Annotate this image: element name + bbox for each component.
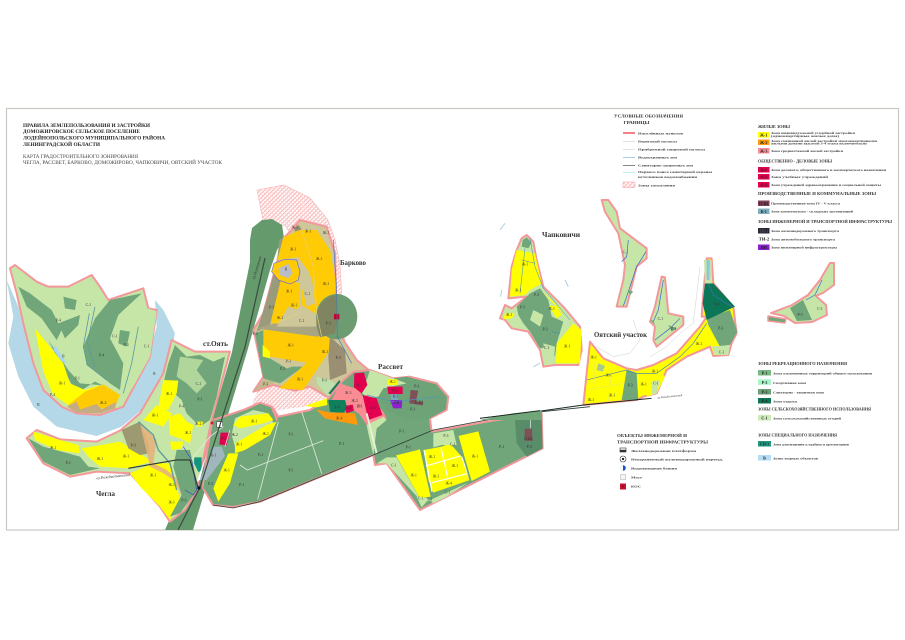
territory: Barkovo: Ж-1 (297, 378, 303, 382)
territory: Rassvet and southern fields: Р-1 (239, 483, 244, 487)
territory: Oyat section: оз.Рождественский (657, 392, 683, 400)
territory: Chapkovichi: Ж-1 (548, 307, 555, 311)
territory: Barkovo: Ж-1 (286, 290, 293, 294)
territory: Barkovo: Ж-1 (277, 316, 283, 320)
territory: Oyat section: Р-3 (718, 326, 723, 330)
territory: Barkovo: Ж-1 (316, 257, 323, 261)
icon: railway crossing (620, 456, 626, 462)
territory: Rassvet and southern fields: Р-3 (410, 408, 415, 412)
legend: special purpose zones: Зоны водных объектов (773, 456, 818, 460)
legend: public and business zones: О-1 (760, 168, 767, 172)
legend: boundaries: Водоохранных зон (638, 156, 677, 160)
railway corridor: зд.Подпорожье (252, 255, 263, 280)
legend: engineering and transport objects: Железнодорожная платформа (631, 449, 696, 453)
territory: Barkovo: С-1 (299, 319, 305, 323)
title block (23, 123, 223, 166)
legend: recreational zones: Р-2 (762, 380, 767, 385)
legend: boundaries: Зоны затопления (638, 184, 675, 188)
legend: boundaries: УСЛОВНЫЕ ОБОЗНАЧЕНИЯ (614, 114, 683, 118)
legend: boundaries (614, 114, 712, 188)
legend: engineering and transport objects: Водонапорная башня (631, 466, 677, 470)
territory: Chapkovichi: Р-3 (542, 328, 548, 332)
territory: eastern island (768, 263, 834, 323)
legend: public and business zones (758, 160, 886, 188)
icon: water tower (621, 465, 626, 471)
territory: lower Chegla (27, 340, 230, 522)
place names: Оятский участок (594, 331, 648, 339)
territory: upper Chegla peninsula: Ж-1 (59, 381, 65, 385)
legend: infrastructure zones: ТИ-2 (759, 236, 770, 242)
territory: Rassvet and southern fields: О-2 (345, 406, 351, 410)
legend: public and business zones: ОБЩЕСТВЕННО - ДЕЛОВЫЕ ЗОНЫ (758, 160, 832, 164)
territory: Oyat section: Ж-1 (652, 370, 658, 374)
territory: Barkovo: Р-3 (280, 367, 285, 371)
legend: production and communal zones: ПРОИЗВОДСТВЕННЫЕ И КОММУНАЛЬНЫЕ ЗОНЫ (758, 192, 876, 196)
railway corridor (165, 219, 284, 530)
territory: Oyat section: Ж-1 (605, 374, 612, 378)
territory: lower Chegla: Р-3 (181, 499, 187, 503)
territory: lower Chegla: Ж-1 (166, 392, 173, 396)
legend: recreational zones: Р-1 (762, 370, 767, 376)
territory: Rassvet and southern fields: Р-1 (288, 433, 294, 437)
legend: recreational zones: Зона озелененных территорий общего пользования (773, 372, 872, 376)
territory: Oyat section: Ж-1 (588, 398, 594, 402)
legend: engineering and transport objects (617, 433, 723, 490)
territory: eastern island: Р-3 (797, 313, 803, 317)
legend: residential zones (758, 125, 878, 154)
territory: Rassvet and southern fields: Р-3 (527, 445, 532, 449)
territory: Chapkovichi: Ж-1 (564, 344, 571, 348)
territory: Rassvet and southern fields: ИИ (394, 401, 400, 405)
station block: Chegla crossing: О-2 (220, 436, 226, 440)
legend: engineering and transport objects: ТРАНСПОРТНОЙ ИНФРАСТРУКТУРЫ (617, 440, 708, 444)
territory: Oyat section: Р-3 (627, 384, 633, 388)
territory: central ribbon parcels: С-1 (658, 317, 663, 321)
legend: engineering and transport objects: КОС (631, 484, 642, 488)
territory: Rassvet and southern fields: Р-1 (499, 445, 504, 449)
territory: Barkovo: Р-3 (286, 360, 291, 364)
legend: production and communal zones: П-К2 (759, 201, 768, 206)
territory: Barkovo: В (285, 268, 288, 272)
title block: ПРАВИЛА ЗЕМЛЕПОЛЬЗОВАНИЯ И ЗАСТРОЙКИ (23, 123, 150, 129)
legend: production and communal zones: Зона коммунально - складских организаций (771, 210, 853, 214)
territory: Chapkovichi: Ж-1 (522, 263, 528, 267)
territory: Oyat section: С-1 (653, 382, 659, 386)
territory: Rassvet and southern fields: П-К2 (524, 437, 533, 441)
territory: lower Chegla: Ж-1 (50, 446, 57, 450)
territory: Rassvet and southern fields: Р-1 (258, 453, 263, 457)
map frame (6, 108, 898, 530)
territory: Rassvet and southern fields: П-К2 (415, 400, 423, 404)
place names: Барково (340, 259, 366, 267)
legend: boundaries: Населённых пунктов (638, 132, 683, 136)
territory: Rassvet and southern fields: Ж-1 (429, 455, 435, 459)
legend: boundaries: Береговой полосы (638, 140, 677, 144)
territory: Rassvet and southern fields: Р-1 (339, 442, 344, 446)
territory: Oyat section: Ж-1 (590, 355, 597, 359)
territory: Rassvet and southern fields: О-3 (369, 406, 375, 410)
legend: boundaries: источников водоснабжения (638, 175, 697, 179)
legend: infrastructure zones: Зона железнодорожного транспорта (771, 229, 839, 233)
territory: Barkovo: Р-3 (269, 305, 274, 309)
legend: agricultural zones (758, 406, 871, 420)
territory: Rassvet and southern fields: К-1 (393, 394, 399, 398)
icon: railway platform (620, 448, 626, 452)
territory: upper Chegla peninsula: В (153, 372, 156, 376)
railway line (178, 258, 265, 530)
legend: recreational zones: Спортивная зона (773, 381, 806, 385)
legend: engineering and transport objects: Мост (631, 476, 642, 480)
territory: Barkovo: Ж-1 (290, 248, 297, 252)
territory: Rassvet and southern fields: ИИ (357, 405, 362, 409)
place names (96, 231, 648, 498)
territory: Barkovo: Ж-3 (291, 225, 298, 229)
territory: Oyat section: Ж-1 (640, 382, 647, 386)
legend: recreational zones: Санаторно - защитная зона (773, 390, 824, 394)
title block: ЧЕГЛА, РАССВЕТ, БАРКОВО, ДОМОЖИРОВО, ЧАПКОВИЧИ, ОЯТСКИЙ УЧАСТОК (23, 160, 223, 166)
station block: Chegla crossing: Ж-1 (251, 419, 258, 423)
icon: treatment facility (620, 484, 626, 490)
territory: lower Chegla: С-1 (196, 382, 201, 386)
territory: upper Chegla peninsula: С-1 (144, 344, 150, 348)
territory: Rassvet and southern fields: Ж-1 (410, 474, 417, 478)
legend: residential zones: Ж-2 (760, 140, 767, 145)
place names: Чапковичи (542, 231, 580, 239)
legend: residential zones: ЖИЛЫЕ ЗОНЫ (758, 125, 790, 129)
legend: special purpose zones: Зона размещения кладбищ и крематориев (773, 442, 849, 446)
legend: engineering and transport objects: Неохраняемый железнодорожный переезд. (631, 458, 723, 462)
legend: infrastructure zones: Зона автомобильного транспорта (771, 238, 835, 242)
territory: upper Chegla peninsula: Р-4 (50, 393, 55, 397)
legend: public and business zones: Зона учреждений здравоохранения и социальной защиты (771, 183, 881, 187)
territory: upper Chegla peninsula: С-1 (86, 303, 91, 307)
legend: public and business zones: О-3 (760, 182, 767, 188)
legend: residential zones: жилыми домами высотой 3-4 этажа включительно (771, 143, 868, 146)
legend: recreational zones: Зона отдыха (773, 400, 797, 404)
territory: Barkovo: С-1 (305, 292, 310, 296)
territory: Barkovo: Ж-1 (291, 304, 297, 308)
territory: Rassvet and southern fields: Р-1 (406, 445, 411, 449)
territory: lower Chegla: оз.Рождественский (96, 472, 130, 480)
territory: eastern island: С-1 (817, 307, 823, 311)
territory: Rassvet and southern fields: Ж-4 (445, 481, 452, 485)
legend: special purpose zones: ЗОНЫ СПЕЦИАЛЬНОГО НАЗНАЧЕНИЯ (758, 434, 837, 438)
territory: lower Chegla: Ж-1 (185, 431, 192, 435)
territory: Rassvet and southern fields: С-1 (450, 442, 456, 446)
legend: agricultural zones: Зона сельскохозяйственных угодий (773, 416, 841, 420)
legend: recreational zones: Р-3 (762, 390, 767, 394)
legend: boundaries: Санитарно-защитных зон (638, 164, 693, 168)
territory: upper Chegla peninsula: В (62, 354, 65, 358)
territory: Oyat section: Ж-1 (696, 342, 702, 346)
legend: production and communal zones: Производственная зона IV - V класса (771, 202, 840, 206)
territory: Barkovo: Р-3 (263, 383, 268, 387)
legend: special purpose zones: В (763, 456, 766, 460)
territory: upper Chegla peninsula (10, 265, 157, 415)
legend: public and business zones: Зона делового, общественного и коммерческого назначения (771, 168, 886, 172)
territory: Rassvet and southern fields: Ж-4 (336, 416, 343, 420)
legend: public and business zones: Зона учебных учреждений (771, 175, 828, 179)
station block: Chegla crossing (192, 403, 277, 502)
station block: Chegla crossing: Р-3 (208, 482, 213, 486)
territory: Barkovo: Ж-1 (323, 282, 329, 286)
legend: boundaries: Первого пояса санитарной охраны (638, 170, 712, 174)
territory: Rassvet and southern fields: С-1 (418, 496, 424, 500)
territory: Rassvet and southern fields: Р-3 (414, 384, 419, 388)
territory: Rassvet and southern fields: О-1 (356, 384, 362, 388)
territory: Barkovo: Р-3 (322, 379, 327, 383)
territory: lower Chegla: Р-1 (66, 461, 71, 465)
territory: lower Chegla: Ж-1 (168, 483, 175, 487)
title block: КАРТА ГРАДОСТРОИТЕЛЬНОГО ЗОНИРОВАНИЯ (23, 155, 139, 160)
territory: lower Chegla: Ж-1 (152, 414, 158, 418)
territory: Rassvet and southern fields: Ж-1 (452, 464, 458, 468)
territory: lower Chegla: Р-1 (197, 398, 203, 402)
flood zone: Barkovo hatched area (252, 185, 350, 412)
territory: Rassvet and southern fields: С-1 (391, 464, 397, 468)
territory: Barkovo (252, 220, 387, 397)
station block: Chegla crossing: К-1 (211, 454, 216, 458)
legend: production and communal zones (758, 192, 876, 214)
legend: infrastructure zones: ТИ-1 (759, 228, 768, 234)
territory: upper Chegla peninsula: В (37, 403, 40, 407)
territory: upper Chegla peninsula: Ж-2 (100, 401, 107, 405)
legend: residential zones: Ж-1 (760, 132, 767, 138)
territory: Rassvet and southern fields: Р-1 (288, 469, 294, 473)
territory: upper Chegla peninsula: Р-4 (99, 354, 104, 358)
territory: Rassvet and southern fields (203, 370, 590, 510)
legend: infrastructure zones: ИИ (761, 245, 768, 250)
territory: Chapkovichi: Ж-1 (506, 313, 513, 317)
legend: agricultural zones: С-1 (761, 416, 768, 420)
legend: residential zones: Зона индивидуальной усадебной застройки (771, 132, 856, 135)
title block: ЛЕНИНГРАДСКОЙ ОБЛАСТИ (23, 142, 100, 148)
territory: Rassvet and southern fields: О-1 (392, 389, 398, 393)
territory: Rassvet and southern fields: С-1 (445, 490, 450, 494)
territory: lower Chegla: Ж-1 (150, 474, 157, 478)
territory: upper Chegla peninsula: С-1 (112, 334, 118, 338)
station block: Chegla crossing: Ж-1 (236, 443, 243, 447)
territory: Barkovo: Ж-1 (287, 344, 294, 348)
legend: infrastructure zones (758, 219, 892, 250)
territory: Oyat section: Р-4 (714, 303, 719, 307)
territory: lower Chegla: Ж-1 (123, 454, 129, 458)
legend: infrastructure zones: ЗОНЫ ИНЖЕНЕРНОЙ И ТРАНСПОРТНОЙ ИНФРАСТРУКТУРЫ (758, 219, 892, 224)
title block: ЛОДЕЙНОПОЛЬСКОГО МУНИЦИПАЛЬНОГО РАЙОНА (23, 136, 165, 142)
legend: residential zones: (одноквартирные жилые дома) (771, 135, 839, 138)
icon: bridge (620, 474, 626, 480)
river (7, 280, 175, 436)
place names: Рассвет (378, 363, 404, 371)
territory: lower Chegla: Ж-1 (97, 457, 103, 461)
territory: Chapkovichi: Р-3 (534, 293, 539, 297)
territory: Oyat section (480, 258, 737, 420)
legend: infrastructure zones: Зона инженерной инфраструктуры (771, 246, 837, 250)
legend: residential zones: Ж-3 (760, 148, 767, 154)
legend: boundaries: ГРАНИЦЫ (624, 121, 650, 125)
station block: Chegla crossing: Ж-1 (262, 432, 269, 436)
legend: special purpose zones (758, 434, 849, 460)
territory: Barkovo: Р-3 (252, 332, 258, 336)
legend: recreational zones: ЗОНЫ РЕКРЕАЦИОННОГО НАЗНАЧЕНИЯ (758, 362, 847, 366)
legend: recreational zones: Р-4 (762, 398, 767, 404)
territory: upper Chegla peninsula: Р-4 (56, 319, 61, 323)
territory: Rassvet and southern fields: Р-1 (427, 498, 433, 502)
legend: boundaries: Прибрежной защитной полосы (638, 148, 705, 152)
territory: central ribbon parcels: С-1 (623, 250, 628, 254)
station block: Chegla crossing: Ж-1 (223, 469, 230, 473)
territory: central ribbon parcels (602, 200, 683, 347)
place names: ст.Оять (203, 340, 228, 348)
territory: Barkovo: Ж-1 (323, 231, 329, 235)
territory: Barkovo: Р-3 (336, 356, 341, 360)
territory: lower Chegla: Р-3 (131, 444, 136, 448)
territory: Rassvet and southern fields: Ж-1 (389, 380, 396, 384)
legend: residential zones: Зона смешанной жилой застройки многоквартирными (771, 140, 878, 143)
territory: Chapkovichi: Ж-1 (515, 289, 522, 293)
territory: Barkovo: Р-3 (326, 321, 331, 325)
territory: Barkovo: Ж-1 (322, 350, 328, 354)
territory: Chapkovichi: С-1 (544, 346, 550, 350)
territory: lower Chegla: Р-4 (179, 404, 184, 408)
legend: production and communal zones: К-1 (761, 209, 767, 214)
territory: Oyat section: Ж-1 (609, 394, 616, 398)
territory: Rassvet and southern fields: Ж-1 (472, 455, 478, 459)
legend: residential zones: Зона среднеэтажной жилой застройки (771, 149, 843, 153)
territory: Rassvet and southern fields: Р-3 (443, 434, 449, 438)
legend: public and business zones: О-2 (760, 174, 767, 180)
station block: Chegla crossing: Ж-2 (231, 433, 238, 437)
legend: recreational zones (758, 362, 872, 404)
territory: central ribbon parcels: Р-3 (671, 327, 676, 331)
territory: Barkovo: Ж-1 (305, 230, 312, 234)
territory: Chapkovichi (500, 223, 582, 367)
territory: Rassvet and southern fields: Р-1 (399, 429, 404, 433)
legend: engineering and transport objects: ОБЪЕКТЫ ИНЖЕНЕРНОЙ И (617, 433, 687, 438)
territory: upper Chegla peninsula: Р-1 (75, 376, 80, 380)
legend: special purpose zones: СП-1 (760, 442, 769, 446)
territory: Oyat section: С-1 (719, 350, 725, 354)
territory: Rassvet and southern fields: Ж-3 (345, 391, 352, 395)
territory: lower Chegla: Ж-1 (168, 500, 175, 504)
territory: Chapkovichi: Р-3 (520, 305, 525, 309)
territory: lower Chegla: Ж-2 (195, 422, 202, 426)
territory: Rassvet and southern fields: Р-4 (335, 406, 340, 410)
territory: Rassvet and southern fields: Ж-1 (433, 474, 439, 478)
legend: agricultural zones: ЗОНЫ СЕЛЬСКОХОЗЯЙСТВЕННОГО ИСПОЛЬЗОВАНИЯ (758, 406, 871, 412)
place names: Чегла (96, 490, 116, 498)
title block: ДОМОЖИРОВСКОЕ СЕЛЬСКОЕ ПОСЕЛЕНИЕ (23, 130, 141, 135)
territory: Rassvet and southern fields: Ж-3 (351, 399, 358, 403)
territory: upper Chegla peninsula: Р-4 (123, 343, 129, 347)
